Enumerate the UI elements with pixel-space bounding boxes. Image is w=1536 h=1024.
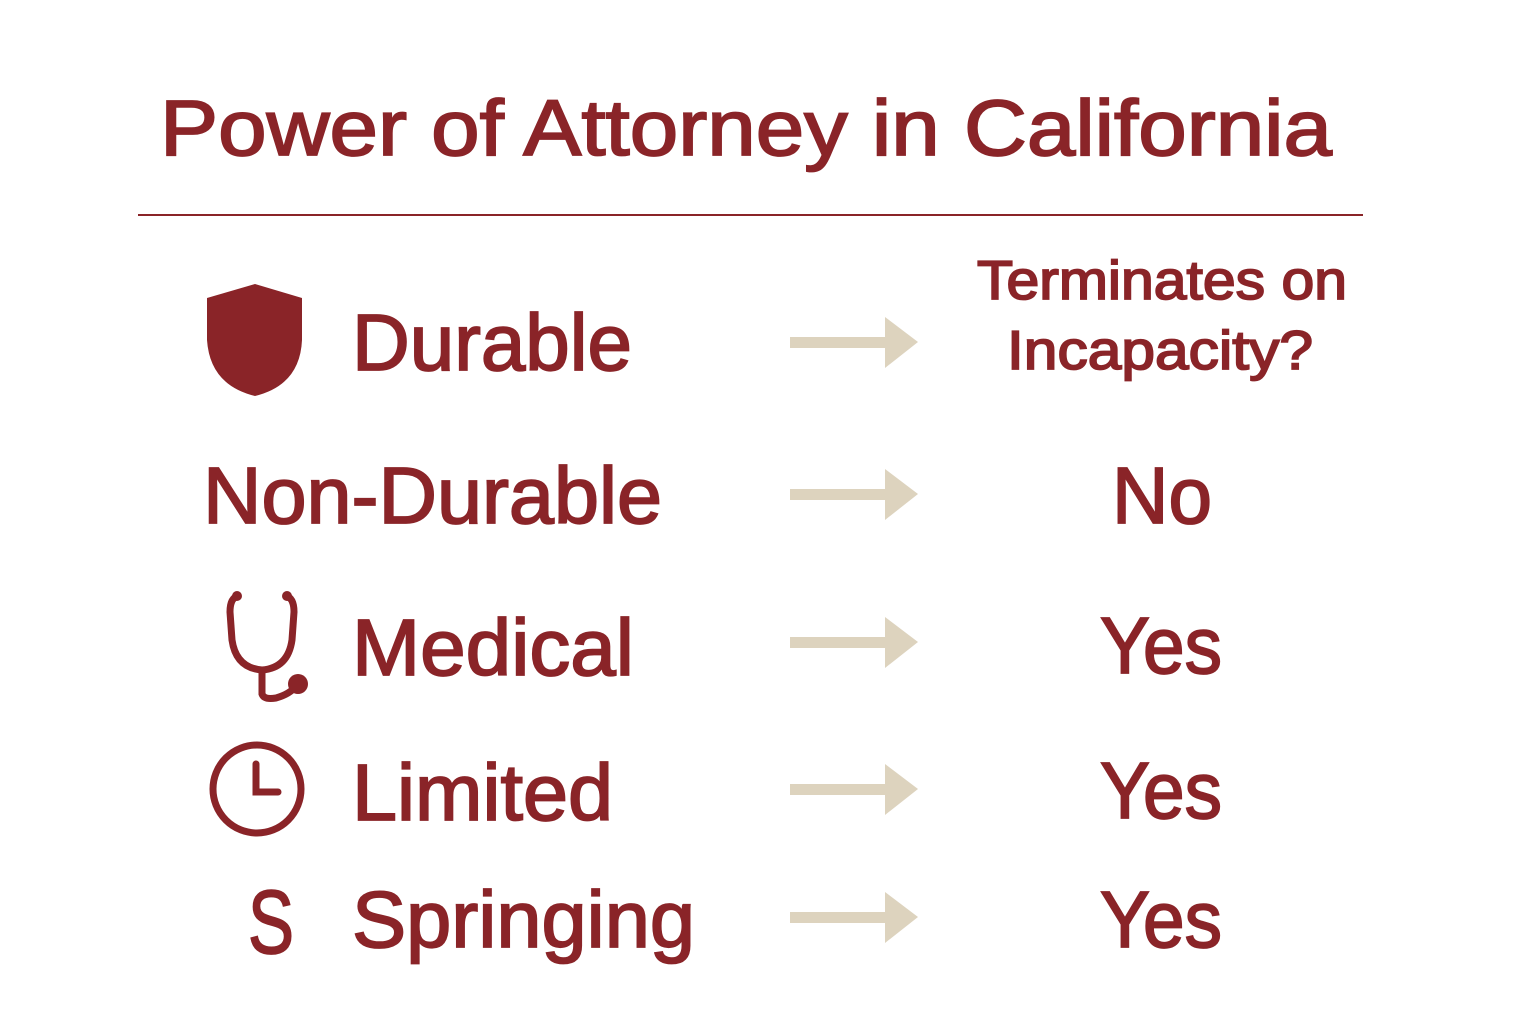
row: springing: Springing: [352, 875, 695, 964]
row: durable: [207, 284, 632, 396]
icon: stethoscope: [230, 596, 296, 698]
row: non-durable: [203, 451, 1212, 540]
arrow: limited: [790, 764, 918, 815]
arrow: springing: [790, 892, 918, 943]
title: Power of Attorney in California: [160, 83, 1332, 172]
row: medical: Yes: [1100, 601, 1222, 690]
arrow: durable: [790, 317, 918, 368]
row: springing: [248, 873, 1222, 973]
column header: terminates on incapacity: Terminates on: [977, 249, 1347, 311]
row: non-durable: Non-Durable: [203, 451, 662, 540]
icon: clock: [213, 745, 301, 833]
row: medical: [230, 591, 1222, 698]
row: limited: Yes: [1100, 746, 1222, 835]
row: durable: Durable: [352, 298, 632, 387]
row: limited: [213, 745, 1222, 837]
column header: terminates on incapacity: [977, 249, 1347, 381]
column header: terminates on incapacity: Incapacity?: [1007, 319, 1313, 381]
row: springing: Yes: [1100, 875, 1222, 964]
icon: shield: [207, 284, 302, 396]
row: limited: Limited: [352, 748, 613, 837]
arrow: medical: [790, 617, 918, 668]
row: non-durable: No: [1112, 451, 1212, 540]
icon: letter S: S: [248, 873, 294, 973]
arrow: non-durable: [790, 469, 918, 520]
row: medical: Medical: [352, 603, 634, 692]
